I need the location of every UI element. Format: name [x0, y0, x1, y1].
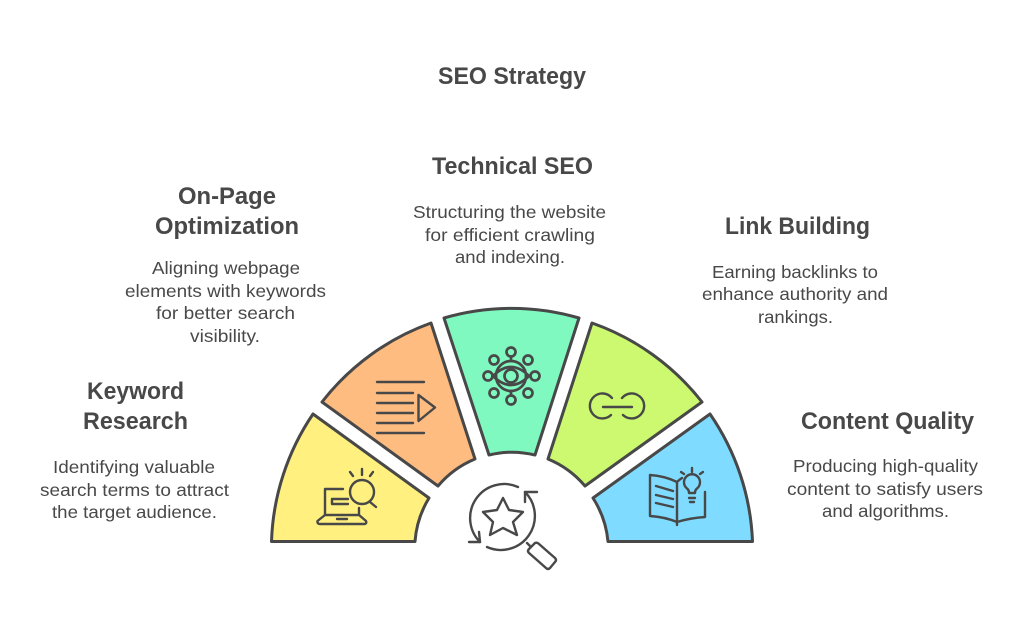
heading and text: on-page optimization: [125, 183, 326, 346]
icon: text lines with arrow: [377, 382, 435, 433]
icon: laptop with magnifier: [317, 469, 376, 524]
heading and text: technical SEO: [413, 153, 606, 267]
panel: link building segment: [548, 323, 702, 486]
heading and text: link building: Link Building: [725, 213, 870, 240]
heading and text: technical SEO: and indexing.: [455, 247, 565, 267]
heading and text: technical SEO: for efficient crawling: [425, 225, 595, 245]
heading and text: keyword research: search terms to attract: [40, 480, 229, 500]
title: SEO Strategy: [438, 63, 587, 90]
heading and text: link building: enhance authority and: [702, 284, 888, 304]
panel: content quality segment: [593, 414, 752, 542]
heading and text: content quality: content to satisfy users: [787, 479, 983, 499]
icon: open book with light bulb: [650, 468, 705, 525]
heading and text: link building: rankings.: [758, 307, 833, 327]
icon: star in magnifier with circular arrows: [469, 484, 556, 569]
panel: on-page optimization segment: [322, 323, 475, 486]
heading and text: on-page optimization: Aligning webpage: [152, 258, 300, 278]
heading and text: on-page optimization: On-Page: [178, 183, 276, 210]
heading and text: keyword research: the target audience.: [52, 502, 217, 522]
heading and text: on-page optimization: for better search: [156, 303, 295, 323]
heading and text: on-page optimization: visibility.: [190, 326, 260, 346]
heading and text: content quality: and algorithms.: [822, 501, 949, 521]
heading and text: keyword research: Research: [83, 408, 188, 435]
heading and text: content quality: [787, 408, 983, 521]
icon: chain link: [590, 393, 644, 418]
heading and text: link building: Earning backlinks to: [712, 262, 878, 282]
heading and text: technical SEO: Technical SEO: [432, 153, 593, 180]
panel: technical SEO segment: [444, 308, 579, 455]
heading and text: on-page optimization: Optimization: [155, 213, 299, 240]
heading and text: link building: [702, 213, 888, 327]
heading and text: keyword research: Keyword: [87, 378, 184, 405]
heading and text: content quality: Content Quality: [801, 408, 975, 435]
heading and text: content quality: Producing high-quality: [793, 456, 978, 476]
icon: eye network: [484, 348, 540, 404]
heading and text: keyword research: [40, 378, 229, 522]
heading and text: keyword research: Identifying valuable: [53, 457, 215, 477]
panel: keyword research segment: [272, 414, 429, 542]
heading and text: on-page optimization: elements with keywords: [125, 281, 326, 301]
heading and text: technical SEO: Structuring the website: [413, 202, 606, 222]
